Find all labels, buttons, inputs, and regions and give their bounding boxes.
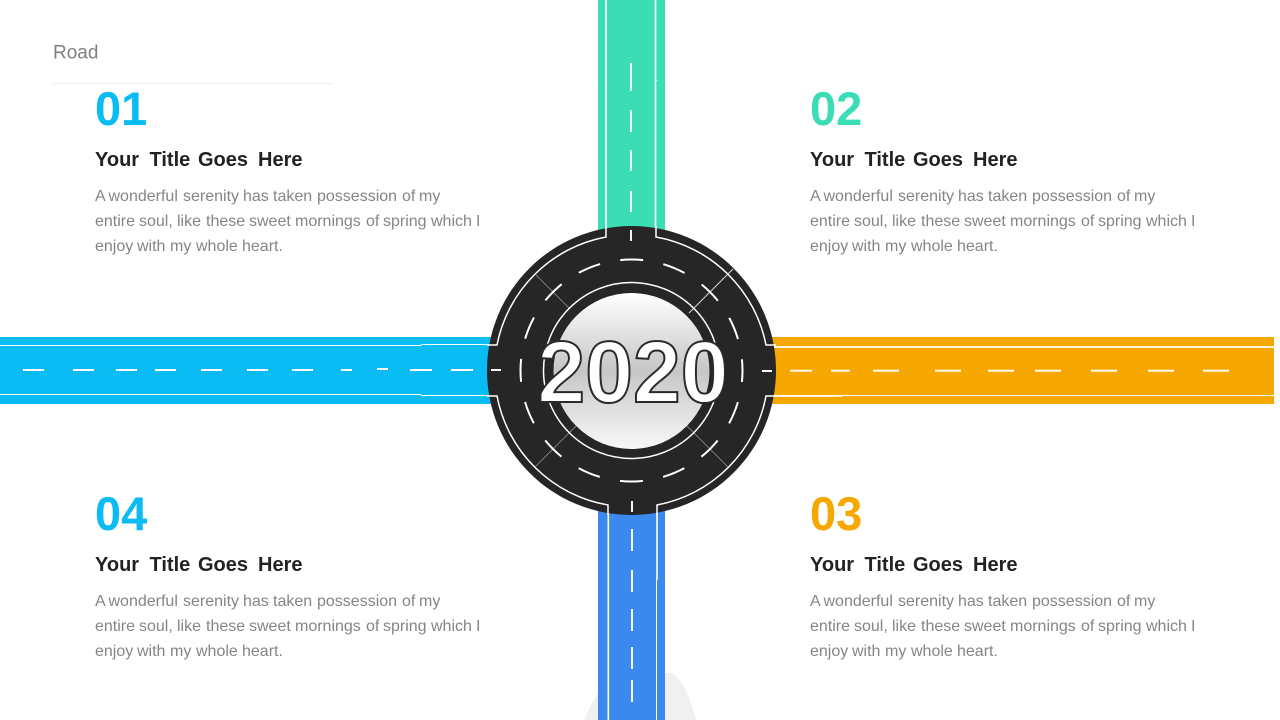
panel 04: whole — [195, 643, 238, 660]
panel 04: 04 — [95, 487, 147, 540]
panel 01: Here — [258, 149, 302, 171]
hub outer lane edges — [487, 226, 776, 515]
panel 02: these — [921, 213, 960, 230]
panel 04: I — [476, 618, 480, 635]
panel 04: wonderful — [108, 593, 178, 610]
panel 03: A — [810, 593, 821, 610]
hub entry ticks — [491, 230, 772, 512]
panel 01: A — [95, 188, 106, 205]
panel 02: Title — [864, 149, 905, 171]
roundabout hub — [487, 226, 776, 515]
panel 01: Title — [150, 149, 190, 171]
panel 04: mornings — [295, 618, 361, 635]
panel 03: Title — [864, 554, 905, 576]
panel 01: I — [476, 213, 480, 230]
panel 03: heart. — [957, 643, 998, 660]
panel 02: mornings — [1010, 213, 1076, 230]
panel 02: Here — [973, 149, 1017, 171]
panel 01: serenity — [183, 188, 239, 205]
panel 01: whole — [195, 238, 238, 255]
panel 04 — [95, 487, 480, 660]
panel 04: sweet — [249, 618, 291, 635]
panel 01: these — [206, 213, 245, 230]
panel 04: these — [206, 618, 245, 635]
panel 04: which — [430, 618, 472, 635]
panel 03: sweet — [964, 618, 1006, 635]
year label: 2020 — [538, 324, 728, 421]
panel 02: I — [1191, 213, 1195, 230]
panel 03: entire — [810, 618, 850, 635]
panel 03: which — [1145, 618, 1187, 635]
panel 03: mornings — [1010, 618, 1076, 635]
panel 04: has — [243, 593, 269, 610]
panel 01: enjoy — [95, 238, 133, 255]
hub centre disc — [554, 293, 710, 449]
road: bottom blue — [598, 500, 665, 720]
panel 01: wonderful — [108, 188, 178, 205]
panel 01: my — [170, 238, 191, 255]
panel 03: Goes — [913, 554, 963, 576]
panel 01: soul, — [139, 213, 173, 230]
panel 02: serenity — [898, 188, 954, 205]
panel 04: of — [366, 618, 380, 635]
panel 02: A — [810, 188, 821, 205]
panel 01: of — [402, 188, 416, 205]
panel 03: like — [892, 618, 916, 635]
panel 04: my — [419, 593, 440, 610]
panel 03: whole — [910, 643, 953, 660]
panel 03: I — [1191, 618, 1195, 635]
panel 04: soul, — [139, 618, 173, 635]
panel 01: taken — [273, 188, 312, 205]
panel 02: soul, — [854, 213, 888, 230]
panel 04: Here — [258, 554, 302, 576]
panel 03: my — [885, 643, 906, 660]
hub diagonal seams — [535, 269, 733, 467]
panel 02: with — [851, 238, 880, 255]
panel 04: with — [136, 643, 165, 660]
panel 02: my — [885, 238, 906, 255]
panel 01: my — [419, 188, 440, 205]
panel 03: serenity — [898, 593, 954, 610]
panel 02: 02 — [810, 82, 862, 135]
panel 02: taken — [988, 188, 1027, 205]
panel 03 — [810, 487, 1195, 660]
panel 04: of — [402, 593, 416, 610]
panel 04: spring — [383, 618, 427, 635]
panel 04: Your — [95, 554, 139, 576]
panel 02: spring — [1098, 213, 1142, 230]
panel 01: mornings — [295, 213, 361, 230]
panel 03: enjoy — [810, 643, 848, 660]
panel 01: heart. — [242, 238, 283, 255]
hub inner ring — [544, 282, 720, 458]
panel 02: like — [892, 213, 916, 230]
panel 01 — [95, 82, 480, 255]
panel 01: spring — [383, 213, 427, 230]
panel 02: of — [1117, 188, 1131, 205]
panel 02: which — [1145, 213, 1187, 230]
panel 01: has — [243, 188, 269, 205]
panel 03: of — [1081, 618, 1095, 635]
panel 02: my — [1134, 188, 1155, 205]
panel 01: 01 — [95, 82, 147, 135]
panel 02: entire — [810, 213, 850, 230]
panel 04: my — [170, 643, 191, 660]
road: left blue — [0, 337, 495, 404]
panel 03: 03 — [810, 487, 862, 540]
panel 02: has — [958, 188, 984, 205]
road: top green — [598, 0, 665, 240]
page heading: Road — [53, 42, 98, 64]
panel 01: possession — [317, 188, 397, 205]
panel 03: of — [1117, 593, 1131, 610]
panel 01: of — [366, 213, 380, 230]
panel 03: Here — [973, 554, 1017, 576]
panel 04: enjoy — [95, 643, 133, 660]
grey backdrop shape behind bottom road — [584, 673, 696, 720]
panel 04: serenity — [183, 593, 239, 610]
panel 02: whole — [910, 238, 953, 255]
panel 03: wonderful — [822, 593, 893, 610]
panel 02: wonderful — [822, 188, 893, 205]
panel 01: Your — [95, 149, 139, 171]
panel 01: with — [136, 238, 165, 255]
panel 04: Goes — [198, 554, 248, 576]
panel 02: sweet — [964, 213, 1006, 230]
panel 04: Title — [150, 554, 190, 576]
panel 03: possession — [1032, 593, 1112, 610]
panel 02: heart. — [957, 238, 998, 255]
panel 01: Goes — [198, 149, 248, 171]
panel 01: entire — [95, 213, 135, 230]
panel 02: of — [1081, 213, 1095, 230]
panel 02: enjoy — [810, 238, 848, 255]
panel 04: entire — [95, 618, 135, 635]
road: right orange — [770, 337, 1274, 404]
panel 01: like — [177, 213, 201, 230]
panel 03: with — [851, 643, 880, 660]
panel 04: like — [177, 618, 201, 635]
panel 04: A — [95, 593, 106, 610]
hub dashed lane — [520, 260, 742, 482]
panel 03: taken — [988, 593, 1027, 610]
panel 01: which — [430, 213, 472, 230]
panel 01: sweet — [249, 213, 291, 230]
panel 02: Goes — [913, 149, 963, 171]
panel 04: taken — [273, 593, 312, 610]
panel 02 — [810, 82, 1195, 255]
panel 02: possession — [1032, 188, 1112, 205]
panel 04: heart. — [242, 643, 283, 660]
panel 02: Your — [810, 149, 854, 171]
panel 03: my — [1134, 593, 1155, 610]
panel 03: has — [958, 593, 984, 610]
panel 03: soul, — [854, 618, 888, 635]
panel 03: Your — [810, 554, 854, 576]
panel 03: spring — [1098, 618, 1142, 635]
panel 03: these — [921, 618, 960, 635]
panel 04: possession — [317, 593, 397, 610]
